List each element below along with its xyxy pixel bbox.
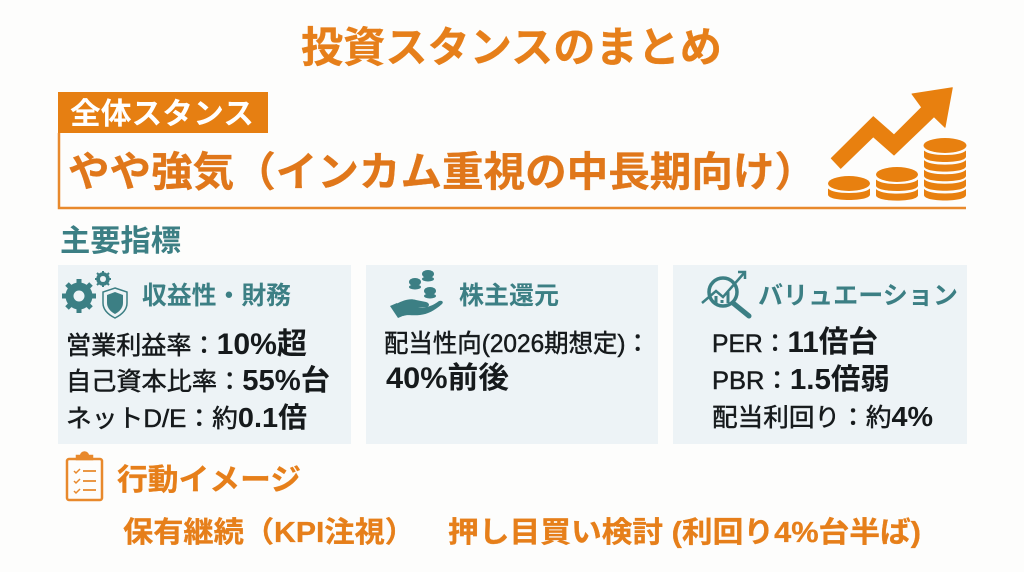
heading: stance statement: やや強気（インカム重視の中長期向け） — [68, 149, 816, 195]
heading: valuation: バリュエーション — [758, 282, 958, 310]
text: action buy on dips: 押し目買い検討 (利回り4%台半ば) — [448, 516, 921, 549]
text: action hold: 保有継続（KPI注視） — [123, 516, 415, 549]
panel: profitability and finance — [58, 265, 351, 444]
label: overall stance — [58, 92, 268, 133]
panel: valuation — [673, 265, 967, 444]
text: PER: PER：11倍台 — [712, 326, 878, 359]
icon: gears and shield — [62, 271, 127, 318]
icon: hand with coins — [390, 270, 443, 318]
text: net D/E: ネットD/E：約0.1倍 — [66, 402, 307, 433]
title: 投資スタンスのまとめ — [301, 24, 722, 71]
heading: action image: 行動イメージ — [117, 464, 301, 497]
panel: shareholder returns — [366, 265, 658, 444]
text: payout ratio: 配当性向(2026期想定)： — [384, 330, 650, 358]
icon: checklist clipboard — [67, 453, 102, 500]
heading: key indicators: 主要指標 — [60, 225, 181, 258]
text: payout value: 40%前後 — [386, 362, 509, 395]
heading: profitability and finance: 収益性・財務 — [142, 282, 291, 310]
text: dividend yield: 配当利回り：約4% — [712, 401, 933, 432]
icon: magnifier with chart — [702, 272, 749, 316]
panel: overall stance — [58, 88, 966, 208]
icon: rising arrow and coin stacks — [828, 88, 966, 201]
label: overall stance: 全体スタンス — [70, 98, 254, 131]
text: equity ratio: 自己資本比率：55%台 — [66, 364, 330, 397]
text: operating margin: 営業利益率：10%超 — [66, 328, 307, 361]
heading: shareholder returns: 株主還元 — [459, 282, 559, 310]
text: PBR: PBR：1.5倍弱 — [712, 363, 890, 396]
